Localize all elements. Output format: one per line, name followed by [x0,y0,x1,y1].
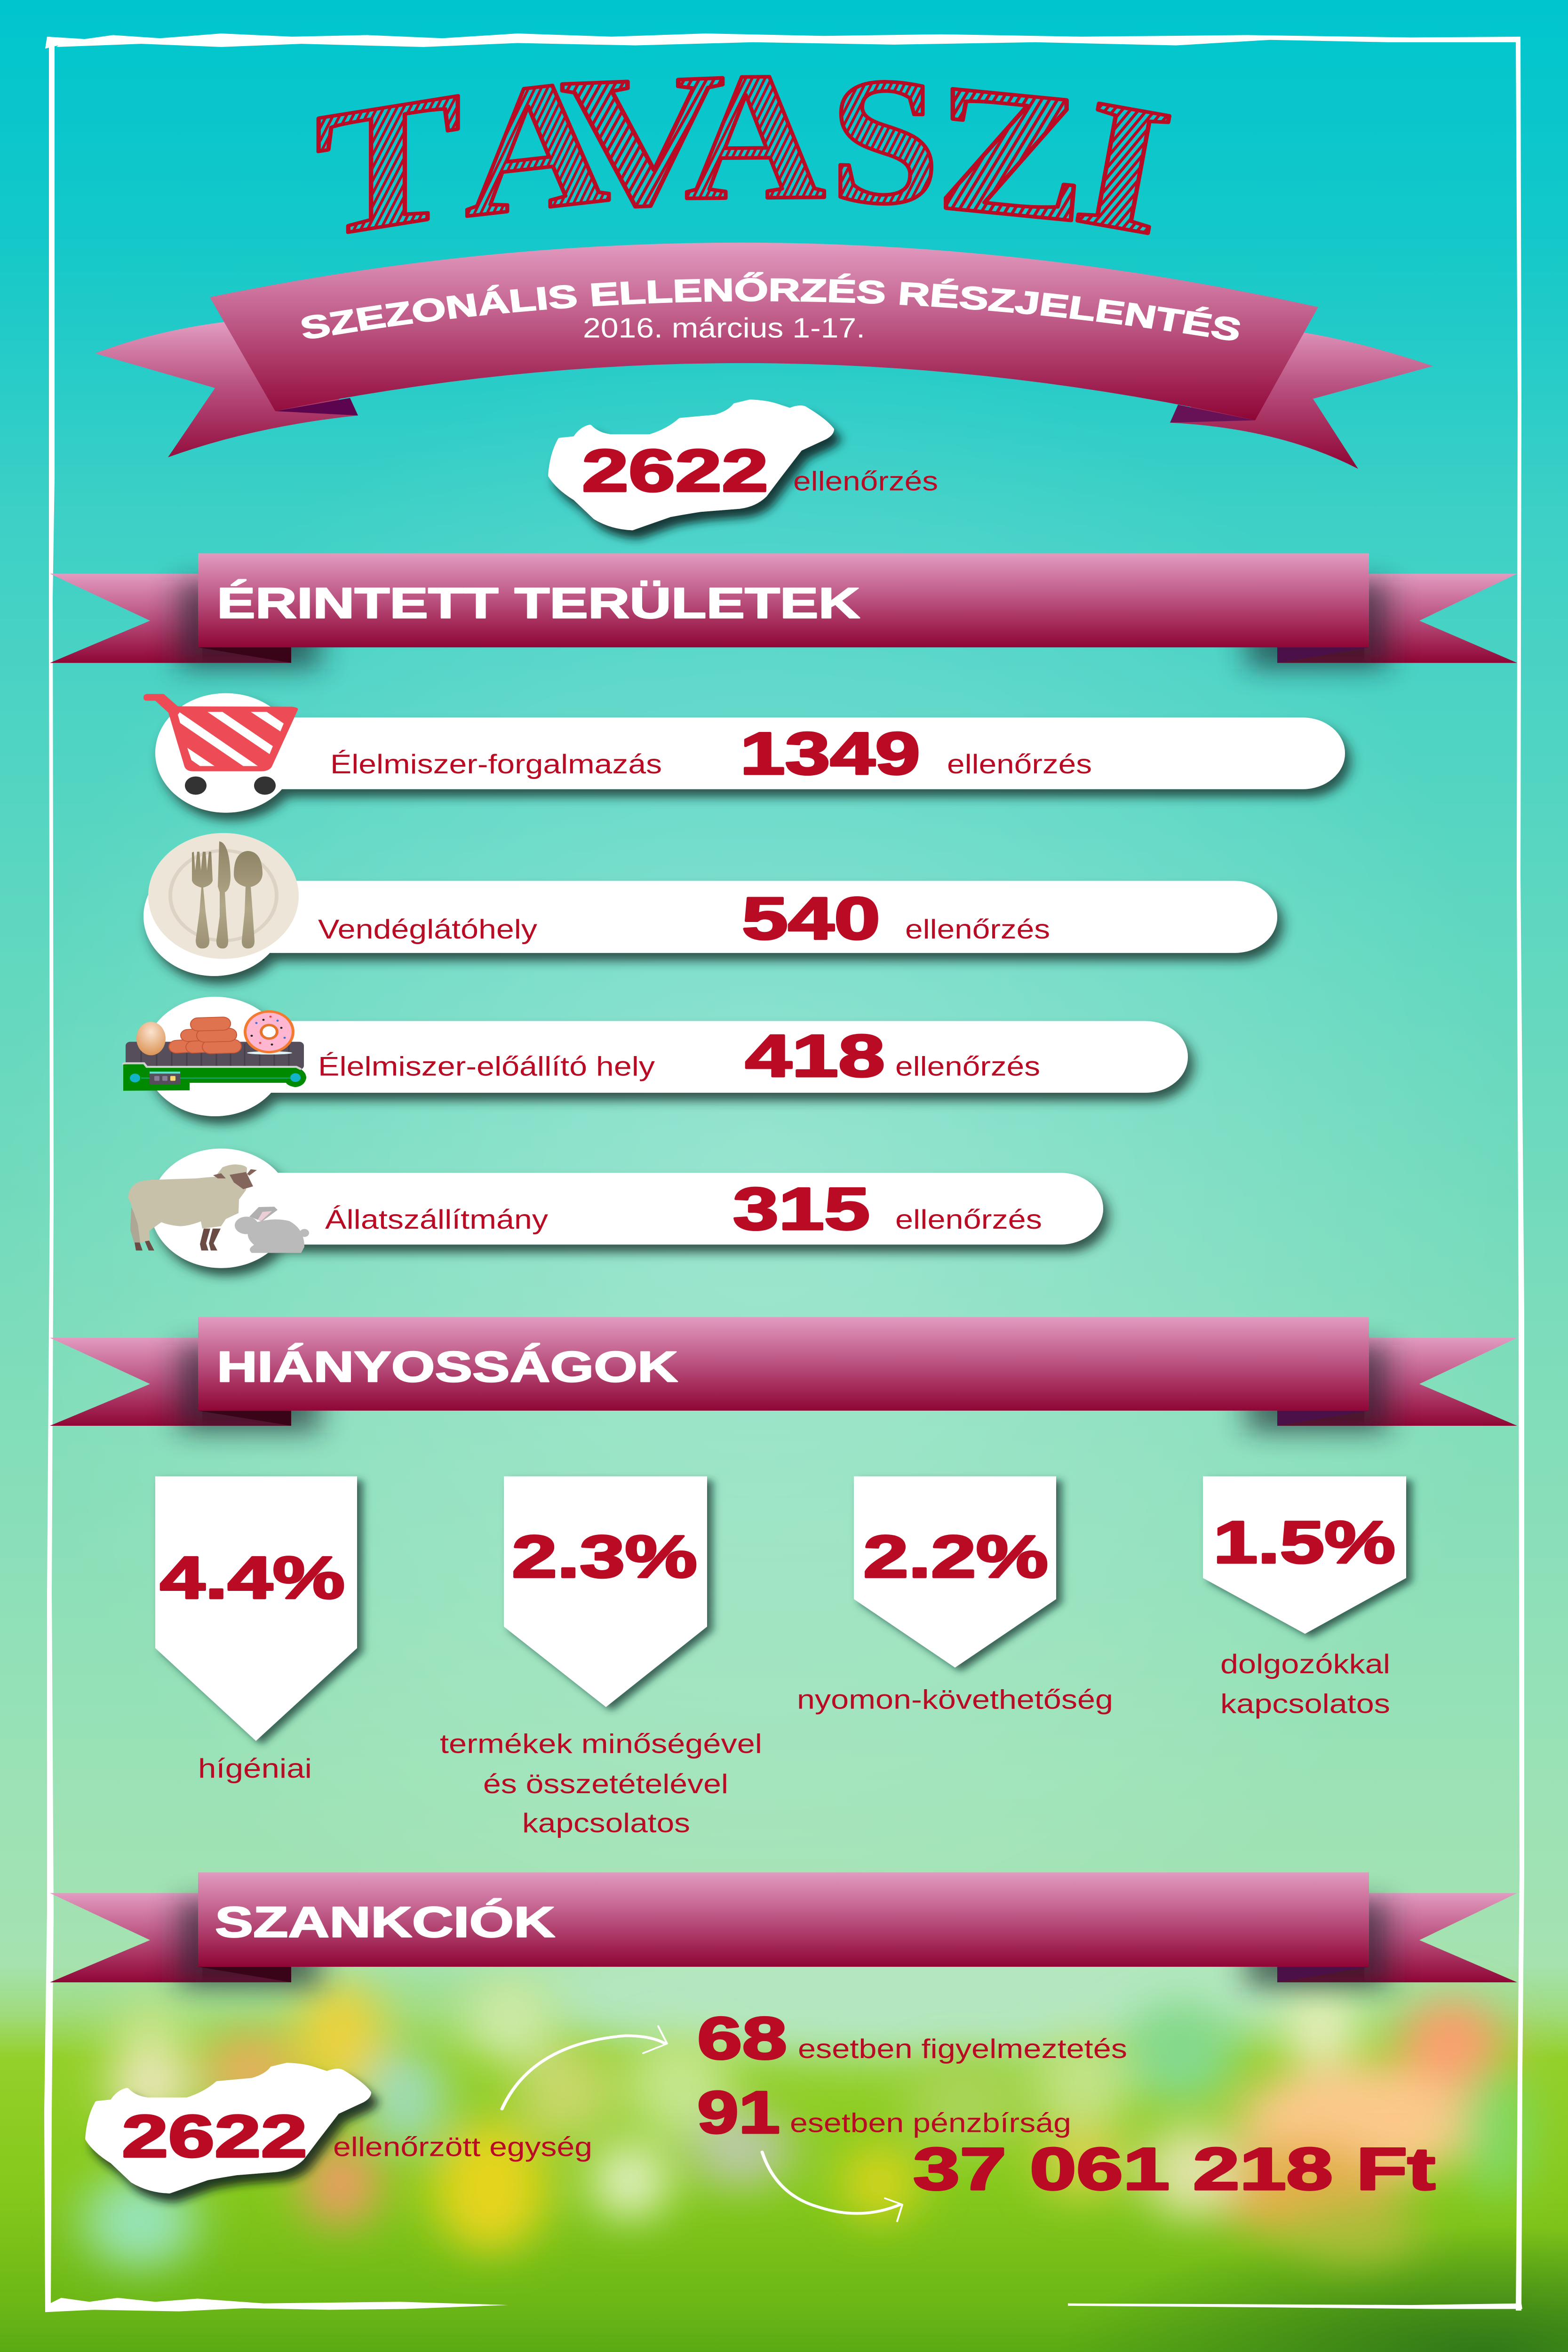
pointer card [1203,1477,1406,1634]
inspected number: 2622 [122,2103,307,2169]
banner left fold [198,647,291,663]
row unit: ellenőrzés [895,1205,1042,1235]
row number: 315 [733,1176,870,1242]
banner left tail [50,1893,202,1982]
banner heading: ÉRINTETT TERÜLETEK [217,579,860,628]
icon: conveyor with food [123,1010,306,1091]
title: TAVASZI: S [830,40,940,243]
row: élelmiszer-forgalmazás [143,693,1345,813]
section banner: érintett területek [50,553,1517,669]
fine total: 37 061 218 Ft [913,2136,1435,2202]
title: TAVASZI: Z [935,44,1085,262]
deficiency: hygiene [155,1477,357,1784]
banner left fold [198,1967,291,1982]
title: TAVASZI: T [315,53,461,277]
label: kapcsolatos [1220,1689,1390,1719]
percentage: 2.2% [863,1524,1048,1590]
curved title ribbon [95,243,1433,469]
deficiency: product quality [440,1477,762,1838]
banner soft shadow [179,1900,1388,1988]
icon: plate with cutlery [148,833,299,959]
label: nyomon-követhetőség [797,1685,1113,1715]
title: TAVASZI: V [560,34,725,247]
fines number: 91 [697,2079,780,2146]
row label: Élelmiszer-előállító hely [318,1051,655,1081]
label: dolgozókkal [1220,1649,1390,1679]
percentage: 2.3% [512,1524,697,1590]
total inspections with Hungary map [550,401,938,529]
row unit: ellenőrzés [895,1051,1040,1081]
banner body [198,553,1369,647]
banner left fold [198,1411,291,1426]
banner heading: SZANKCIÓK [215,1898,555,1947]
inspected label: ellenőrzött egység [333,2132,592,2162]
banner tail under-edge left [202,1967,291,1982]
background dark corner [0,2111,1568,2352]
row label: Vendéglátóhely [318,914,538,945]
row label: Élelmiszer-forgalmazás [330,749,662,779]
arrow to fine total [762,2152,902,2221]
deficiency: traceability [797,1477,1113,1715]
section banner: szankciók [50,1872,1517,1988]
row number: 1349 [740,720,920,787]
row unit: ellenőrzés [947,749,1092,779]
ribbon date: 2016. március 1-17. [583,312,865,343]
ribbon right fold [1170,405,1255,423]
icon: Hungary map [87,2065,369,2192]
banner tail under-edge left [202,647,291,663]
pointer card [155,1477,357,1741]
icon: shopping cart [143,694,298,795]
row unit: ellenőrzés [905,914,1050,945]
banner left tail [50,1338,202,1426]
row card [151,1149,1103,1268]
row label: Állatszállítmány [325,1205,549,1235]
inspected units [87,2065,592,2192]
banner body [198,1872,1369,1967]
banner right fold [1277,647,1369,663]
banner tail under-edge right [1277,1967,1364,1982]
title: TAVASZI: A [465,37,610,256]
percentage: 4.4% [160,1544,345,1611]
label: hígéniai [198,1754,312,1784]
banner tail under-edge right [1277,1411,1364,1426]
row number: 418 [745,1023,885,1089]
ribbon right tail [1170,332,1433,469]
banner tail under-edge right [1277,647,1364,663]
banner right tail [1364,574,1517,663]
arrow to warnings [502,2026,667,2109]
total number: 2622 [582,437,768,504]
label: termékek minőségével [440,1729,762,1759]
section banner: hiányosságok [50,1317,1517,1432]
title: TAVASZI [315,34,1184,277]
label: kapcsolatos [522,1808,690,1838]
row: vendéglátóhely [143,833,1277,976]
label: és összetételével [483,1769,728,1799]
pointer card [504,1477,707,1707]
icon: sheep and rabbit [128,1164,309,1253]
banner right fold [1277,1967,1369,1982]
banner tail under-edge left [202,1411,291,1426]
title: TAVASZI: I [1063,60,1184,274]
banner right tail [1364,1893,1517,1982]
row: élelmiszer-előállító hely [123,997,1188,1116]
title: TAVASZI: A [685,34,826,238]
warnings label: esetben figyelmeztetés [798,2034,1127,2064]
warnings [697,2005,1127,2072]
row card [143,857,1277,976]
fines label: esetben pénzbírság [790,2108,1071,2138]
row card [144,997,1188,1116]
pointer card [854,1477,1056,1668]
ribbon heading: SZEZONÁLIS ELLENŐRZÉS RÉSZJELENTÉS [297,272,1244,348]
row card [155,693,1345,813]
banner right tail [1364,1338,1517,1426]
ribbon left tail [95,322,358,457]
blurred spring meadow background [84,1922,1529,2269]
banner left tail [50,574,202,663]
label [1220,1649,1390,1719]
banner soft shadow [179,581,1388,669]
row number: 540 [742,885,880,952]
row: állatszállítmány [128,1149,1103,1268]
deficiency: staff related [1203,1477,1406,1719]
total label: ellenőrzés [793,466,938,496]
fines [697,2079,1071,2146]
banner right fold [1277,1411,1369,1426]
icon: Hungary map [550,401,832,529]
warnings number: 68 [697,2005,787,2072]
banner body [198,1317,1369,1411]
banner soft shadow [179,1345,1388,1432]
percentage: 1.5% [1213,1509,1395,1576]
label [440,1729,762,1838]
banner heading: HIÁNYOSSÁGOK [217,1343,678,1391]
ribbon left fold [275,398,358,415]
ribbon main body [210,243,1318,420]
